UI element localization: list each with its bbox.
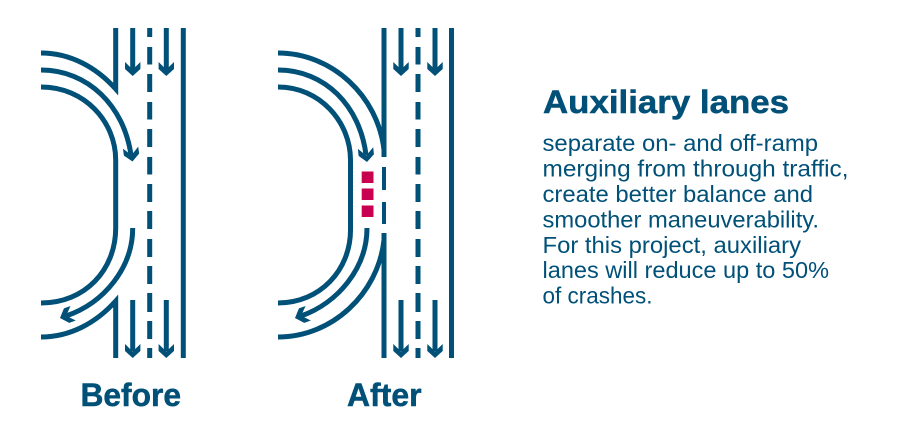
arrow: off-ramp	[292, 228, 367, 325]
text block: description: smoother maneuverability.	[542, 206, 819, 232]
lane dashes	[147, 28, 152, 358]
arrow: on-ramp	[278, 70, 375, 163]
text block: description: merging from through traffic,	[542, 156, 848, 182]
lower road edge	[382, 233, 386, 358]
text block: description	[542, 130, 848, 308]
merging road edge	[41, 28, 116, 89]
arrow: through lane top left	[393, 28, 409, 76]
arrow: through lane bottom right	[427, 300, 443, 358]
arrow: through lane top left	[125, 28, 140, 76]
upper merging ramp edge	[278, 53, 384, 150]
text block: description: lanes will reduce up to 50%	[542, 257, 829, 283]
heading: Auxiliary lanes	[543, 84, 789, 120]
label: after: After	[347, 377, 422, 413]
text block: description: create better balance and	[542, 181, 813, 207]
continuous ramp and road left edge	[41, 87, 116, 303]
panel: before diagram	[41, 28, 183, 358]
lane dashes	[416, 28, 420, 358]
arrow: through lane top right	[159, 28, 174, 76]
auxiliary lane dashes	[382, 167, 386, 224]
text block: description: separate on- and off-ramp	[542, 130, 818, 156]
panel: after diagram	[278, 28, 452, 358]
arrow: through lane top right	[427, 28, 443, 76]
right road edge	[181, 28, 186, 358]
right road edge	[449, 28, 454, 358]
text block: description: of crashes.	[542, 282, 652, 308]
continuous ramp and auxiliary lane edge	[278, 87, 350, 303]
diverging road edge	[41, 301, 116, 358]
arrow: on-ramp	[41, 70, 140, 163]
lower merging ramp edge	[278, 240, 384, 337]
text block: description: For this project, auxiliary	[542, 232, 802, 258]
label: before: Before	[80, 377, 181, 413]
upper road edge	[382, 28, 386, 157]
auxiliary lane markers	[362, 172, 374, 217]
arrow: off-ramp	[57, 228, 133, 325]
arrow: through lane bottom left	[393, 300, 409, 358]
arrow: through lane bottom right	[159, 300, 174, 358]
arrow: through lane bottom left	[125, 300, 140, 358]
